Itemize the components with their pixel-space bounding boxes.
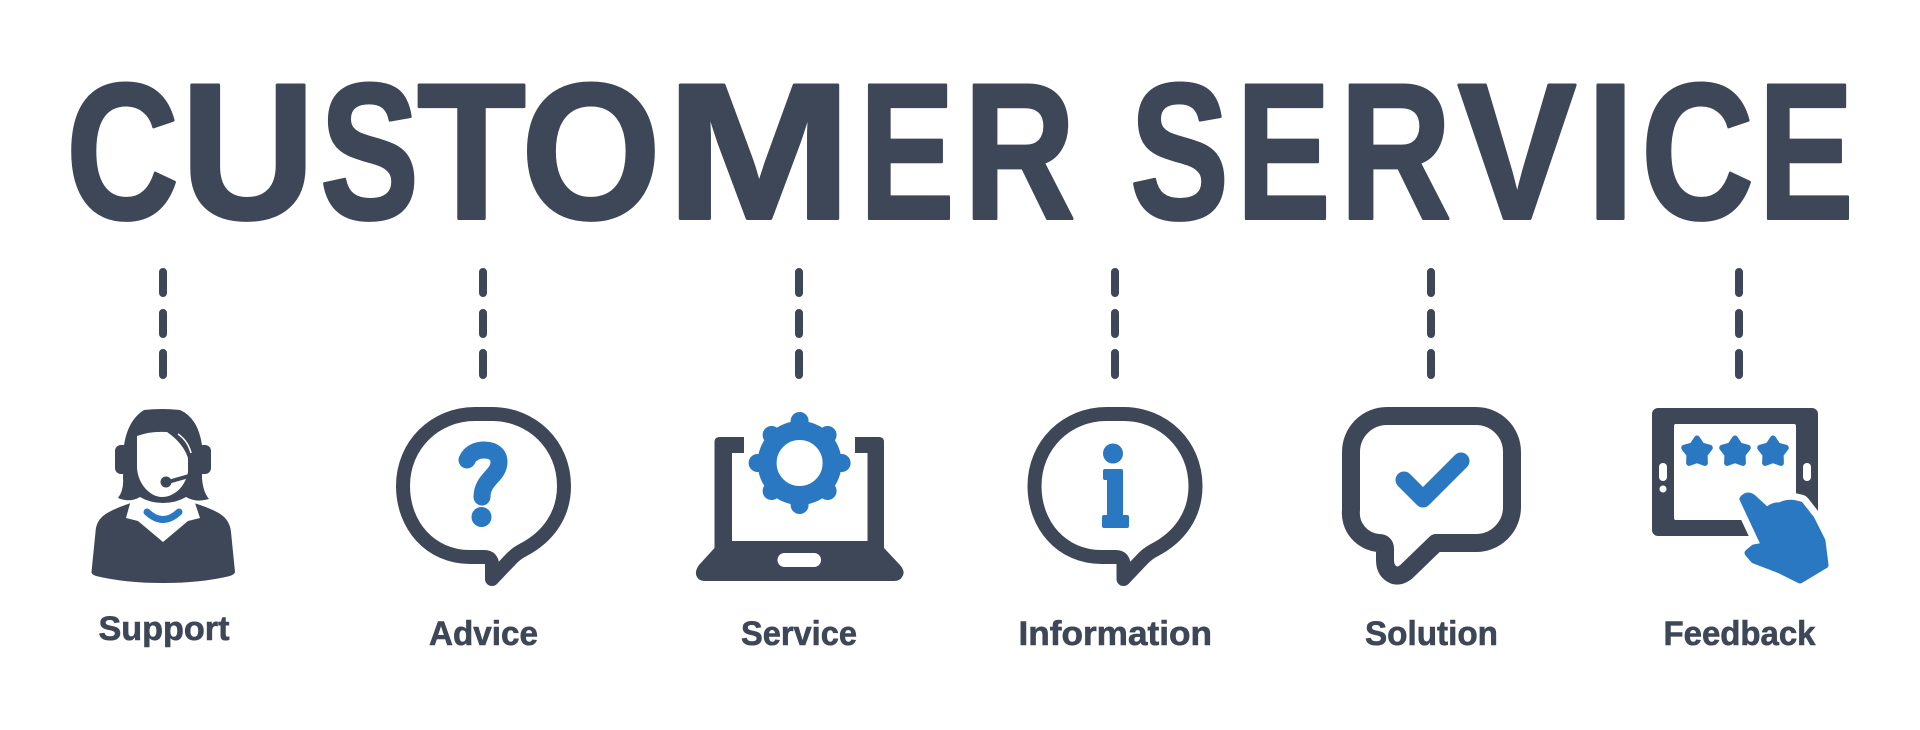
title: E xyxy=(860,44,954,260)
title: E xyxy=(1758,44,1854,260)
title: T xyxy=(417,44,526,260)
label: advice: Advice xyxy=(429,615,538,653)
connector: information xyxy=(1111,272,1119,375)
title: U xyxy=(180,44,316,260)
panel: information xyxy=(1018,272,1212,653)
connector: support xyxy=(159,272,167,375)
title: S xyxy=(320,44,419,260)
panel: solution xyxy=(1351,272,1512,653)
title: C xyxy=(1641,44,1754,260)
panel: advice xyxy=(403,272,564,653)
panel: service xyxy=(696,272,904,653)
icon: support agent with headset xyxy=(91,409,235,583)
icon: question speech bubble xyxy=(403,414,564,579)
icon: information speech bubble xyxy=(1034,414,1196,579)
title: V xyxy=(1458,44,1576,260)
connector: service xyxy=(795,272,803,375)
title: C xyxy=(66,44,179,260)
label: solution: Solution xyxy=(1365,615,1498,653)
title: I xyxy=(1586,44,1635,260)
connector: solution xyxy=(1427,272,1435,375)
label: support: Support xyxy=(98,610,230,648)
title: M xyxy=(666,44,852,260)
icon: tablet with star rating and hand xyxy=(1652,408,1825,580)
title: O xyxy=(521,44,661,260)
panel: feedback xyxy=(1652,272,1825,653)
connector: advice xyxy=(479,272,487,375)
label: information: Information xyxy=(1018,615,1212,653)
label: service: Service xyxy=(741,615,857,653)
title: S xyxy=(1130,44,1229,260)
icon: check mark speech bubble xyxy=(1351,416,1512,576)
panel: support xyxy=(91,272,235,648)
connector: feedback xyxy=(1735,272,1743,375)
title: E xyxy=(1236,44,1330,260)
label: feedback: Feedback xyxy=(1664,615,1816,653)
icon: laptop with gear xyxy=(696,421,904,581)
title: R xyxy=(964,44,1076,260)
title: R xyxy=(1340,44,1452,260)
